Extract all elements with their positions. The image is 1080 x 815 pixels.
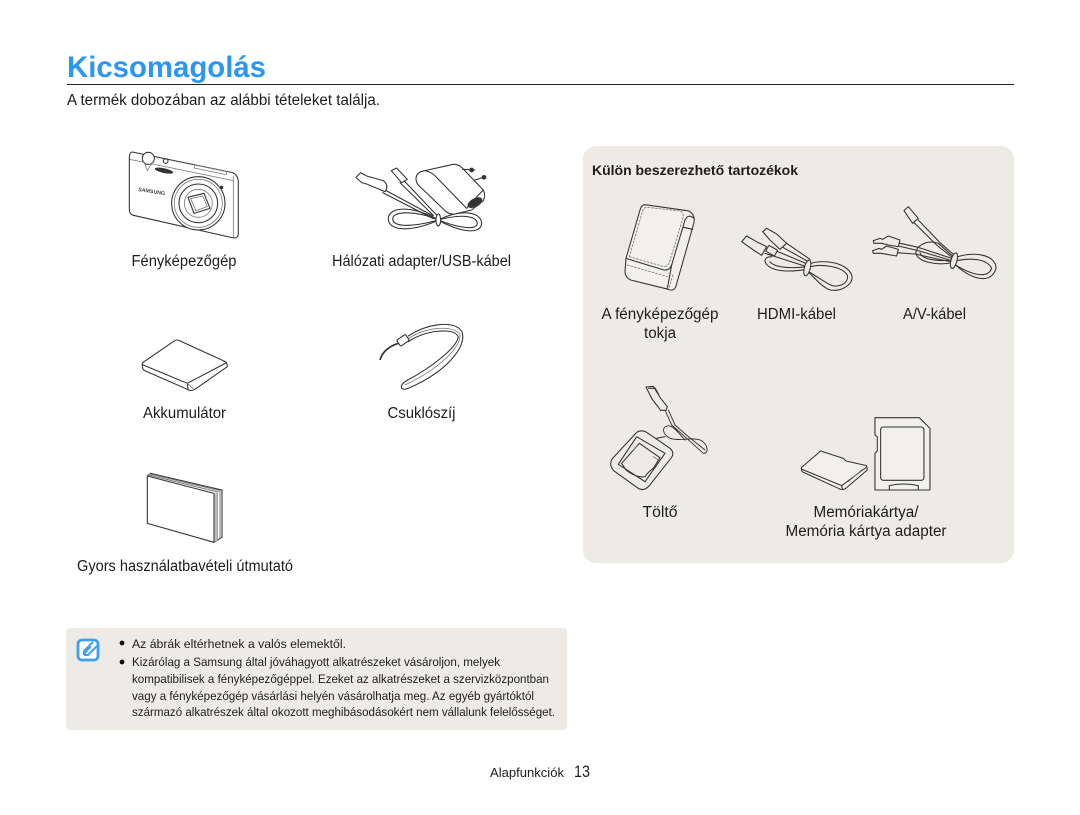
footer: section name and page number: Alapfunkciók	[490, 765, 564, 780]
title rule	[67, 84, 1014, 85]
item: battery	[142, 340, 227, 422]
note: bullet 2: Kizárólag a Samsung által jóváhagyott alkatrészeket vásároljon, melyek	[132, 655, 501, 669]
item: camera	[129, 152, 238, 270]
label: memory card and adapter	[786, 504, 946, 540]
panel: optional accessories background	[583, 146, 1014, 563]
icon: HDMI cable	[742, 228, 852, 290]
icon: adapter and USB cable	[356, 164, 486, 231]
footer: section name and page number: 13	[574, 762, 590, 781]
label: HDMI cable: HDMI-kábel	[757, 306, 836, 323]
icon: charger	[611, 386, 707, 490]
item: charger	[611, 386, 707, 521]
label: battery: Akkumulátor	[143, 405, 226, 422]
panel heading: optional accessories: Külön beszerezhető tartozékok	[592, 163, 798, 178]
title: Kicsomagolás	[67, 51, 266, 84]
item: quick start guide	[77, 473, 293, 575]
note: bullet 1: Az ábrák eltérhetnek a valós elemektől.	[132, 637, 346, 651]
item: camera case	[602, 205, 718, 342]
icon: A/V cable	[873, 207, 996, 279]
label: adapter and USB cable: Hálózati adapter/USB-kábel	[332, 253, 511, 270]
icon: camera case	[625, 205, 694, 290]
note: bullet 2: származó alkatrészek által okozott meghibásodásokért nem vállalunk felelősséget.	[132, 705, 555, 719]
item: memory card and adapter	[786, 418, 946, 540]
icon: battery	[142, 340, 227, 390]
note: bullet 2: vagy a fényképezőgép vásárlási helyén vásárolhatja meg. Az egyéb gyártóktól	[132, 689, 534, 703]
icon: memory card and adapter	[801, 418, 930, 490]
label: camera case	[602, 306, 718, 342]
intro text: A termék dobozában az alábbi tételeket találja.	[67, 92, 380, 109]
label: camera: Fényképezőgép	[132, 253, 236, 270]
icon: note pencil	[78, 640, 98, 660]
icon: quick start guide	[147, 473, 222, 542]
item: adapter and USB cable	[332, 164, 511, 270]
item: wrist strap	[380, 324, 463, 422]
item: HDMI cable	[742, 228, 852, 323]
label: quick start guide: Gyors használatbavételi útmutató	[77, 558, 293, 575]
footer: section name and page number	[490, 762, 590, 781]
item: A/V cable	[873, 207, 996, 323]
label: memory card and adapter: Memóriakártya/	[814, 504, 919, 521]
label: memory card and adapter: Memória kártya adapter	[786, 523, 946, 540]
label: wrist strap: Csuklószíj	[388, 405, 456, 422]
panel: note	[66, 628, 567, 730]
note: bullet 2	[120, 655, 555, 719]
icon: camera: SAMSUNG	[138, 187, 166, 197]
label: camera case: tokja	[644, 325, 676, 342]
label: camera case: A fényképezőgép	[602, 306, 718, 323]
note: bullet 2: kompatibilisek a fényképezőgéppel. Ezeket az alkatrészeket a szervizközpontban	[132, 672, 549, 686]
icon: wrist strap	[380, 324, 463, 389]
label: charger: Töltő	[642, 504, 678, 521]
label: A/V cable: A/V-kábel	[903, 306, 966, 323]
